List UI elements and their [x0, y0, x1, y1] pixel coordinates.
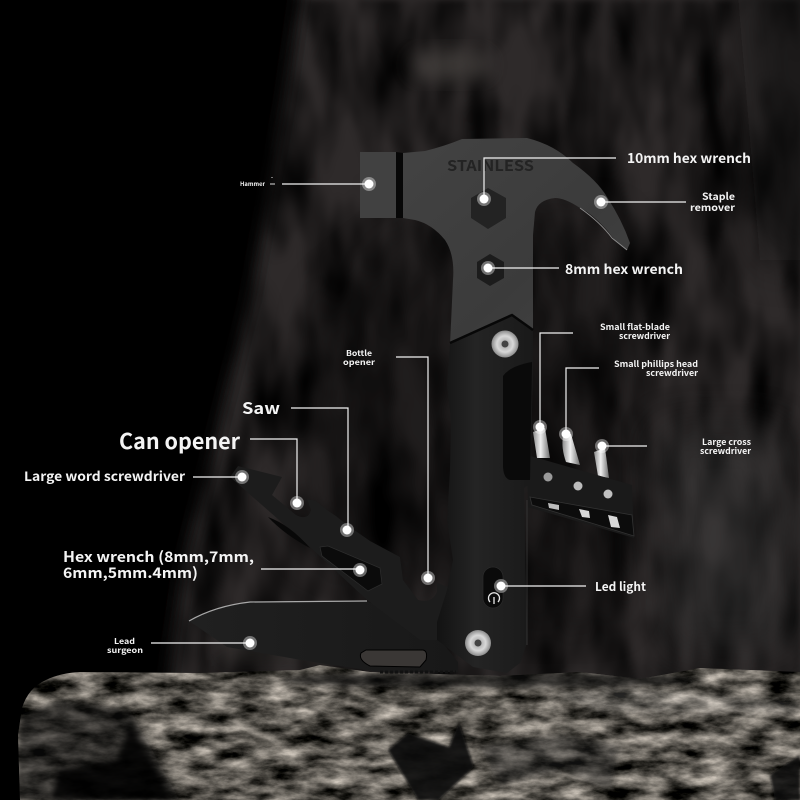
callout: can opener: Can opener — [119, 425, 241, 456]
callout: staple remover: remover — [690, 199, 736, 214]
bit: large cross — [594, 448, 609, 478]
callout: hammer: Hammer — [240, 180, 266, 188]
callout: hex wrench set: Hex wrench (8mm,7mm, — [63, 546, 254, 567]
callout: small flat-blade screwdriver — [533, 321, 670, 434]
bit: small flat-blade — [533, 428, 550, 458]
callout: 8mm hex wrench — [481, 258, 683, 278]
knife blade — [189, 601, 458, 672]
callout: LED light — [494, 578, 646, 595]
handle — [437, 315, 533, 673]
callout: saw — [242, 395, 354, 537]
stamped STAINLESS mark: STAINLESS — [447, 155, 534, 176]
callout: lead surgeon: surgeon — [107, 645, 143, 656]
callout: small flat-blade screwdriver: Small flat-blade — [600, 321, 670, 333]
top screw — [492, 330, 518, 358]
callout: bottle opener: opener — [343, 357, 376, 368]
bottom screw — [465, 630, 491, 656]
callout: small phillips head screwdriver: screwdriver — [646, 367, 698, 379]
side slot — [503, 362, 532, 480]
LED switch — [483, 567, 503, 608]
hammer head — [360, 138, 630, 345]
bit holder plate — [527, 455, 634, 538]
callout: hex wrench set — [63, 546, 367, 583]
callout: lead surgeon: Lead — [114, 636, 135, 647]
callout: large cross screwdriver: Large cross — [702, 436, 751, 448]
callout: small phillips head screwdriver — [559, 358, 698, 441]
callout: bottle opener — [343, 348, 435, 585]
callout: hex wrench set: 6mm,5mm.4mm) — [63, 562, 198, 583]
10mm hex socket — [471, 188, 506, 229]
bit: small phillips — [562, 434, 580, 465]
callout: large word screwdriver — [24, 466, 249, 485]
rock ledge — [18, 665, 800, 800]
callout: staple remover: Staple — [702, 188, 735, 203]
callout: large cross screwdriver — [595, 436, 751, 457]
callout: can opener — [119, 425, 304, 510]
folding saw and can opener tool — [230, 466, 450, 640]
callout: large cross screwdriver: screwdriver — [700, 445, 751, 457]
screwdriver bits holder — [527, 428, 634, 538]
callout: small phillips head screwdriver: Small phillips head — [614, 358, 698, 370]
callout: LED light: Led light — [595, 578, 646, 595]
callout: 8mm hex wrench: 8mm hex wrench — [565, 258, 683, 278]
callout: large word screwdriver: Large word screwdriver — [24, 466, 185, 485]
shadow under the tool — [280, 672, 700, 688]
callout: small flat-blade screwdriver: screwdriver — [619, 330, 670, 342]
8mm hex socket — [477, 254, 504, 286]
callout: saw: Saw — [242, 395, 280, 419]
callout: 10mm hex wrench — [477, 147, 751, 206]
callout: bottle opener: Bottle — [346, 348, 372, 359]
callout: 10mm hex wrench: 10mm hex wrench — [627, 147, 751, 167]
callout: hammer — [240, 177, 376, 191]
callout: lead surgeon — [107, 636, 257, 656]
callout: staple remover — [594, 188, 736, 214]
